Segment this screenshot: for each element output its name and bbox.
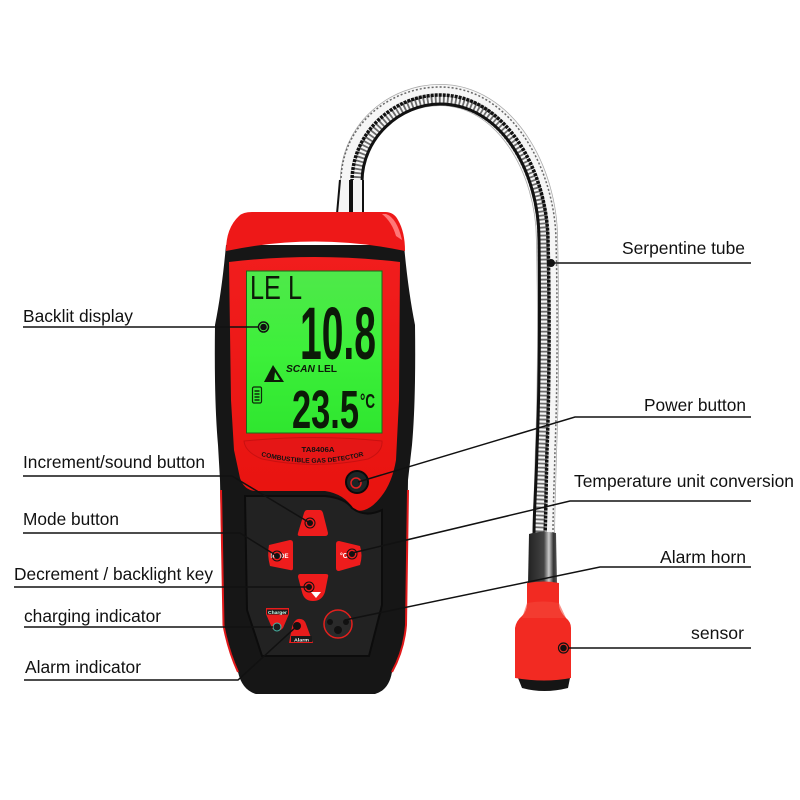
label: increment/sound button: Increment/sound button xyxy=(23,452,205,472)
black housing xyxy=(215,245,415,694)
temperature reading: 23.5 xyxy=(292,380,359,440)
gas reading: 10.8 xyxy=(300,292,376,375)
red side grips xyxy=(221,490,408,672)
mode button: MODE xyxy=(270,554,288,560)
alarm indicator: Alarm xyxy=(294,638,309,642)
power button xyxy=(346,471,368,493)
degree unit: °C xyxy=(360,391,375,413)
label: backlit display xyxy=(23,306,268,332)
label: alarm horn: Alarm horn xyxy=(660,547,746,567)
ferrule xyxy=(528,532,557,584)
red display panel xyxy=(229,257,400,511)
mode button xyxy=(268,540,293,570)
warning icon xyxy=(264,365,284,382)
model text: COMBUSTIBLE GAS DETECTOR xyxy=(262,452,364,463)
alarm horn xyxy=(324,610,352,638)
decrement button xyxy=(298,574,328,601)
label: power button xyxy=(358,395,751,482)
charger indicator: Charger xyxy=(268,610,287,615)
label: charging indicator: charging indicator xyxy=(24,606,161,626)
temperature unit button xyxy=(336,541,362,571)
SCAN LEL label: SCAN LEL xyxy=(286,364,337,375)
serpentine metal tube xyxy=(337,87,557,535)
label: mode button xyxy=(23,509,277,556)
sensor cap xyxy=(518,678,570,691)
label: mode button: Mode button xyxy=(23,509,119,529)
red sensor head xyxy=(515,582,571,680)
charger indicator xyxy=(266,608,289,631)
battery icon xyxy=(252,387,262,403)
model text: TA8406A xyxy=(302,445,335,454)
label: increment/sound button xyxy=(23,452,310,523)
LEL label: LE L xyxy=(250,269,302,306)
label: alarm horn xyxy=(345,547,751,620)
label: alarm indicator xyxy=(24,626,297,680)
black keypad panel xyxy=(245,496,382,656)
label: power button: Power button xyxy=(644,395,746,415)
sensor probe xyxy=(515,532,571,691)
label: temperature unit conversion xyxy=(352,471,794,553)
red top cap xyxy=(226,212,405,251)
alarm indicator xyxy=(289,619,313,643)
label: serpentine tube: Serpentine tube xyxy=(622,238,745,258)
label: backlit display: Backlit display xyxy=(23,306,133,326)
label: sensor xyxy=(558,623,751,653)
label: decrement / backlight key: Decrement / backlight key xyxy=(14,564,213,584)
label: sensor: sensor xyxy=(691,623,744,643)
label: alarm indicator: Alarm indicator xyxy=(25,657,141,677)
backlit LCD display xyxy=(246,269,382,440)
detector body xyxy=(214,212,416,694)
temperature unit button: °C xyxy=(340,552,348,560)
label: serpentine tube xyxy=(548,238,751,266)
model text xyxy=(244,437,382,465)
label: temperature unit conversion: Temperature unit conversion xyxy=(574,471,794,491)
increment button xyxy=(298,510,328,536)
